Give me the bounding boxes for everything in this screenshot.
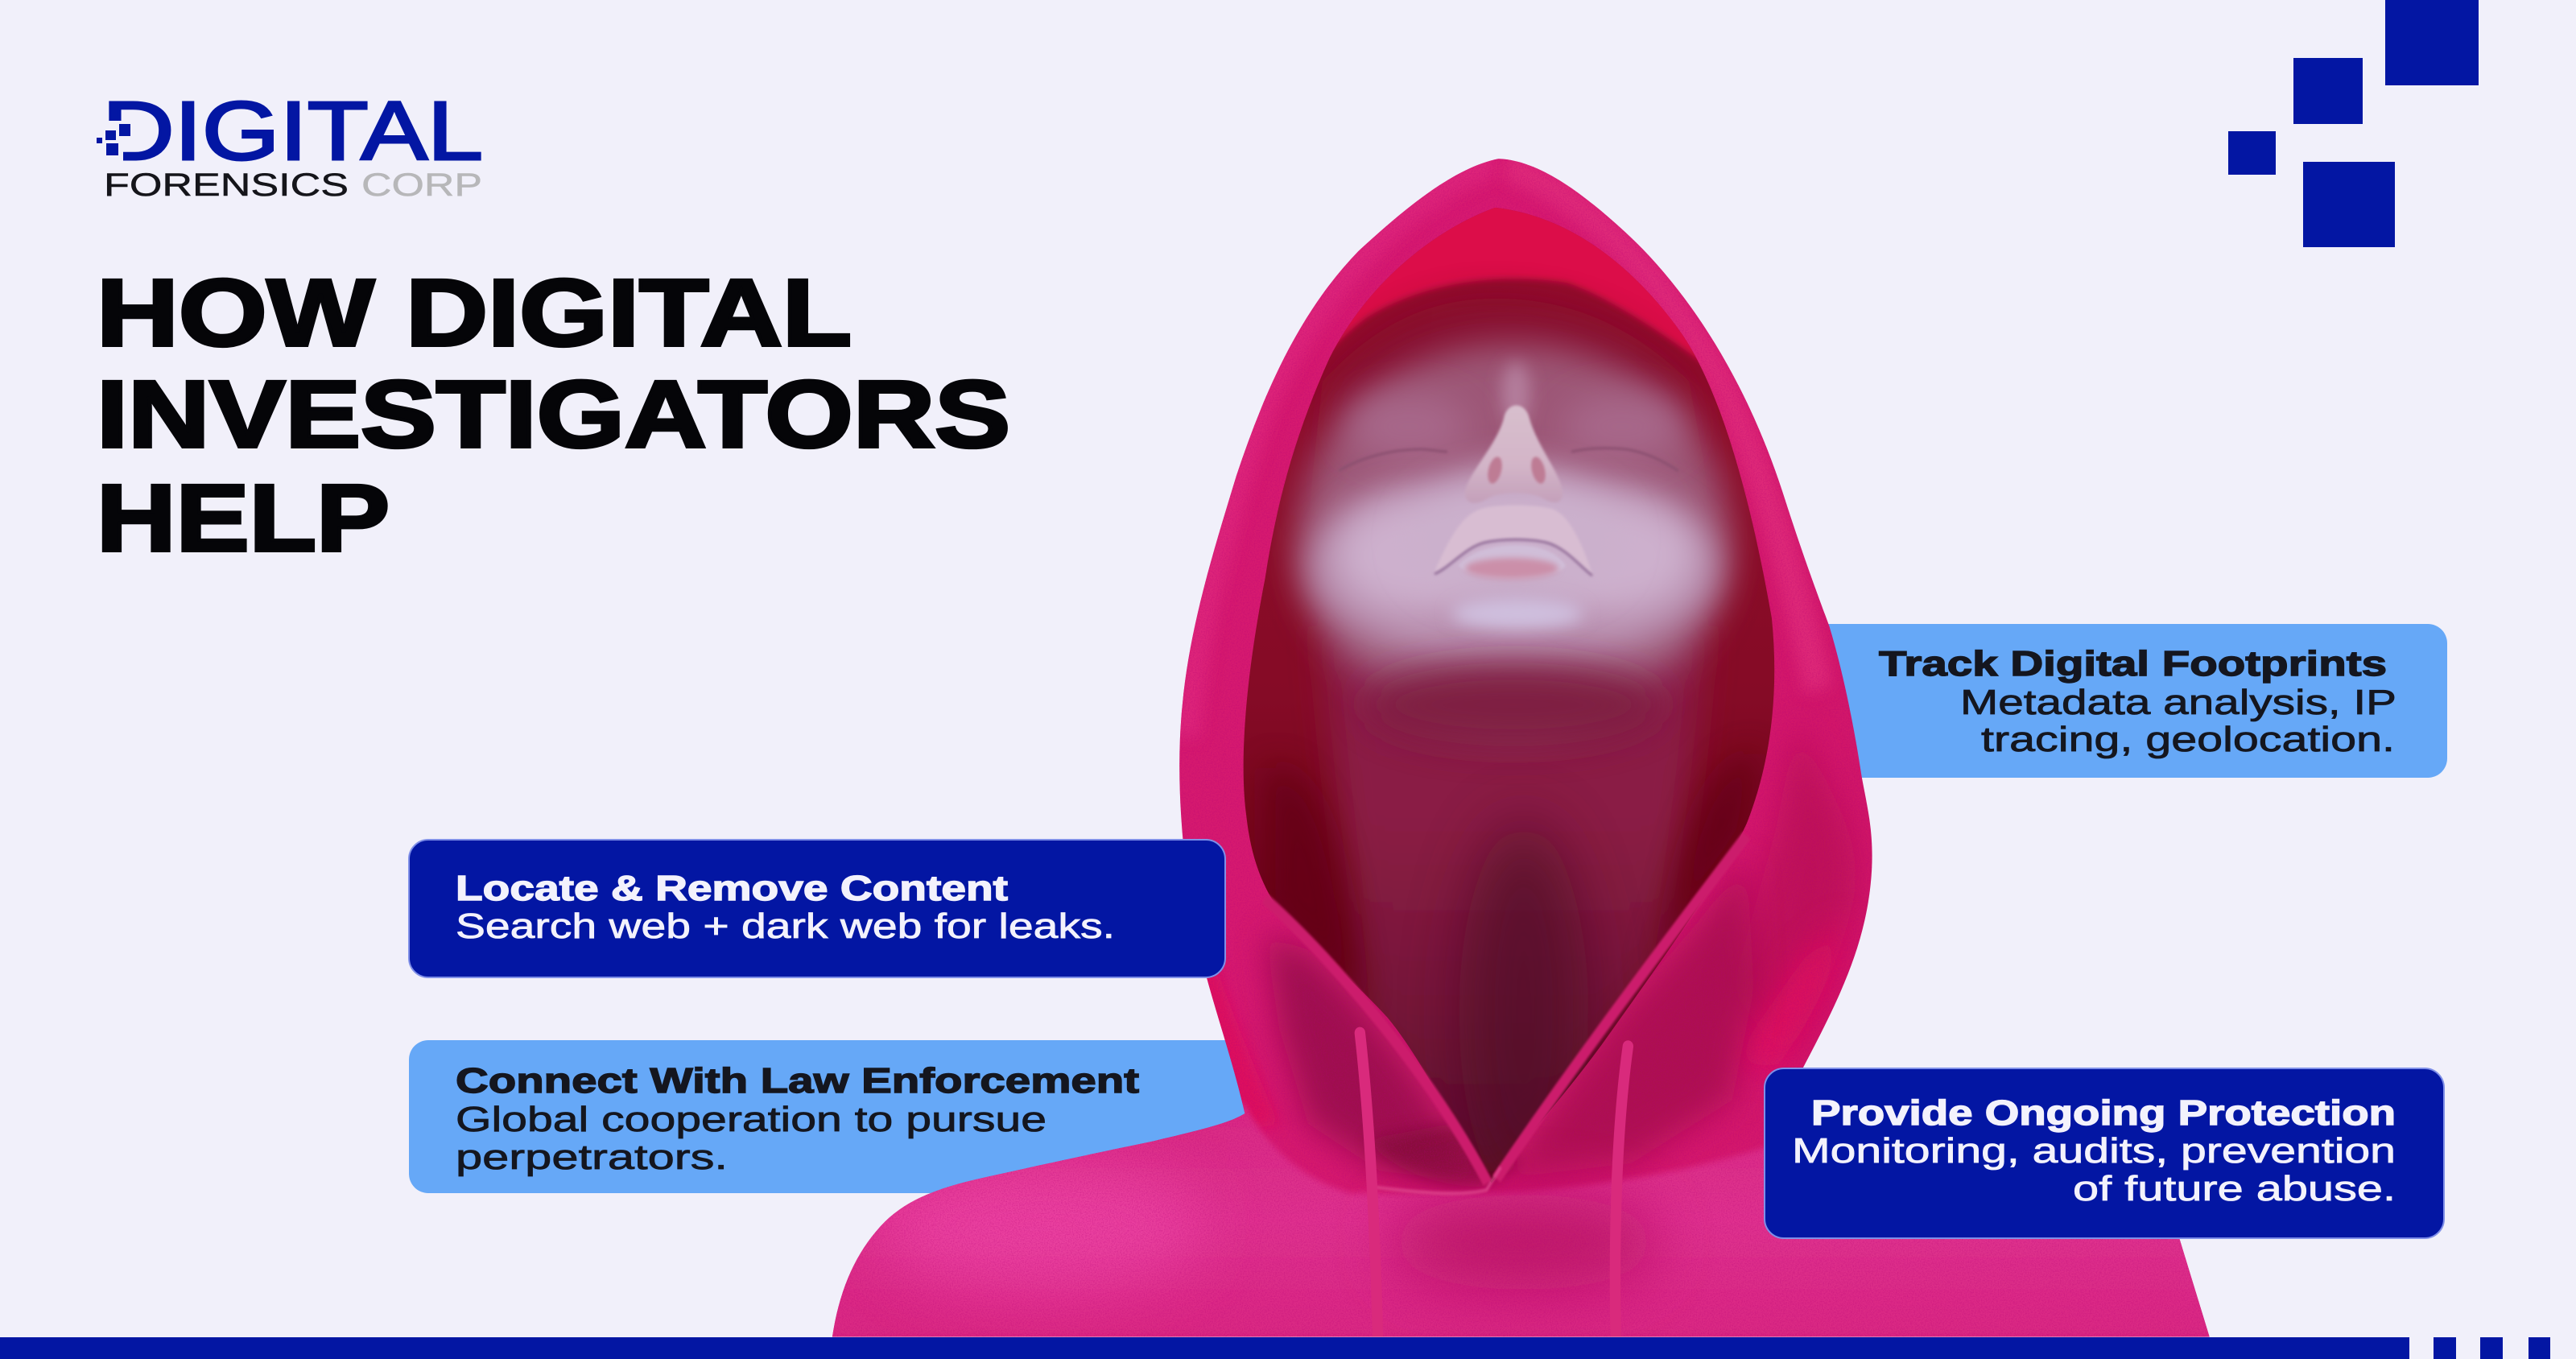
- panel: Track Digital Footprints: [1731, 624, 2447, 778]
- chin shadow: [1364, 663, 1662, 746]
- lower face light left: [1336, 499, 1497, 612]
- nose bridge light: [1501, 362, 1530, 427]
- chin light: [1451, 597, 1583, 630]
- inner hood top band: [1272, 200, 1718, 421]
- panel: Provide Ongoing Protection: Monitoring, audits, prevention: [1792, 1131, 2396, 1171]
- decorative squares top right: [2228, 0, 2479, 247]
- collar fold shadow: [1365, 1124, 1524, 1187]
- fabric texture: [805, 121, 2243, 1353]
- footer bar with segments: [0, 1337, 2550, 1359]
- under-nose light: [1411, 475, 1620, 604]
- panel: Track Digital Footprints: Metadata analysis, IP: [1960, 683, 2396, 722]
- right nostril: [1529, 456, 1548, 485]
- panel: Locate and Remove Content: Locate & Remove Content: [456, 869, 1008, 908]
- panel: Track Digital Footprints: Track Digital Footprints: [1879, 644, 2387, 684]
- face features: [1339, 406, 1678, 579]
- lower face light right: [1534, 499, 1695, 612]
- hood rim left: [1265, 898, 1488, 1183]
- panel: Connect With Law Enforcement: Global cooperation to pursue: [456, 1100, 1046, 1139]
- logo line FORENSICS: FORENSICS: [104, 167, 349, 203]
- title: HELP: [97, 465, 390, 572]
- panel: Locate and Remove Content: [409, 840, 1225, 977]
- logo line CORP: CORP: [361, 167, 482, 203]
- title: [97, 260, 1010, 572]
- illustration: hooded figure looking up: [805, 121, 2243, 1359]
- panel: Connect With Law Enforcement: Connect With Law Enforcement: [456, 1061, 1139, 1101]
- hood rim right: [1496, 836, 1747, 1179]
- neck centre shadow: [1459, 824, 1588, 1203]
- lip crease: [1435, 539, 1592, 576]
- eye closed right: [1571, 448, 1678, 471]
- shoulder highlight: [877, 1163, 1208, 1290]
- panel: Connect With Law Enforcement: perpetrators.: [456, 1138, 728, 1177]
- hood front flap left: [1265, 934, 1484, 1183]
- hood interior with face: [1208, 184, 1811, 1211]
- hood base: [805, 121, 2243, 1353]
- logo wordmark DIGITAL: DIGITAL: [102, 85, 483, 177]
- upper lip: [1435, 506, 1592, 573]
- face in page coordinates: [1298, 342, 1729, 746]
- title: HOW DIGITAL: [97, 260, 852, 366]
- neck: [1323, 626, 1703, 1183]
- panel: Connect With Law Enforcement: [409, 1040, 1262, 1193]
- title: INVESTIGATORS: [97, 361, 1010, 468]
- hood front flap right: [1499, 855, 1754, 1179]
- chest shadow: [1387, 1195, 1661, 1290]
- nose: [1465, 406, 1563, 503]
- drawstring right: [1615, 1047, 1628, 1340]
- panel: Provide Ongoing Protection: [1765, 1068, 2444, 1238]
- forehead right: [1562, 394, 1682, 459]
- hood shading: [1186, 160, 1856, 1132]
- right neck shadow: [1646, 753, 1761, 981]
- left neck shadow: [1265, 767, 1362, 1006]
- collar seam: [1373, 1167, 1501, 1193]
- panel: Provide Ongoing Protection: of future abuse.: [2073, 1169, 2396, 1208]
- left nostril: [1485, 456, 1505, 485]
- panel: Track Digital Footprints: tracing, geolocation.: [1981, 720, 2395, 759]
- lower lip: [1459, 545, 1566, 578]
- sweater body: [832, 1102, 2210, 1337]
- cheek mid tone: [1308, 467, 1719, 668]
- panel: Locate and Remove Content: Search web + dark web for leaks.: [456, 907, 1115, 946]
- forehead left: [1348, 394, 1469, 459]
- lower lip tone: [1465, 558, 1558, 579]
- panel: Provide Ongoing Protection: Provide Ongoing Protection: [1811, 1093, 2396, 1133]
- logo: Digital Forensics Corp: [97, 85, 483, 203]
- face base mauve: [1298, 342, 1729, 729]
- logo pixel squares: [97, 121, 130, 163]
- drawstring left: [1360, 1033, 1378, 1340]
- eye closed left: [1339, 449, 1447, 471]
